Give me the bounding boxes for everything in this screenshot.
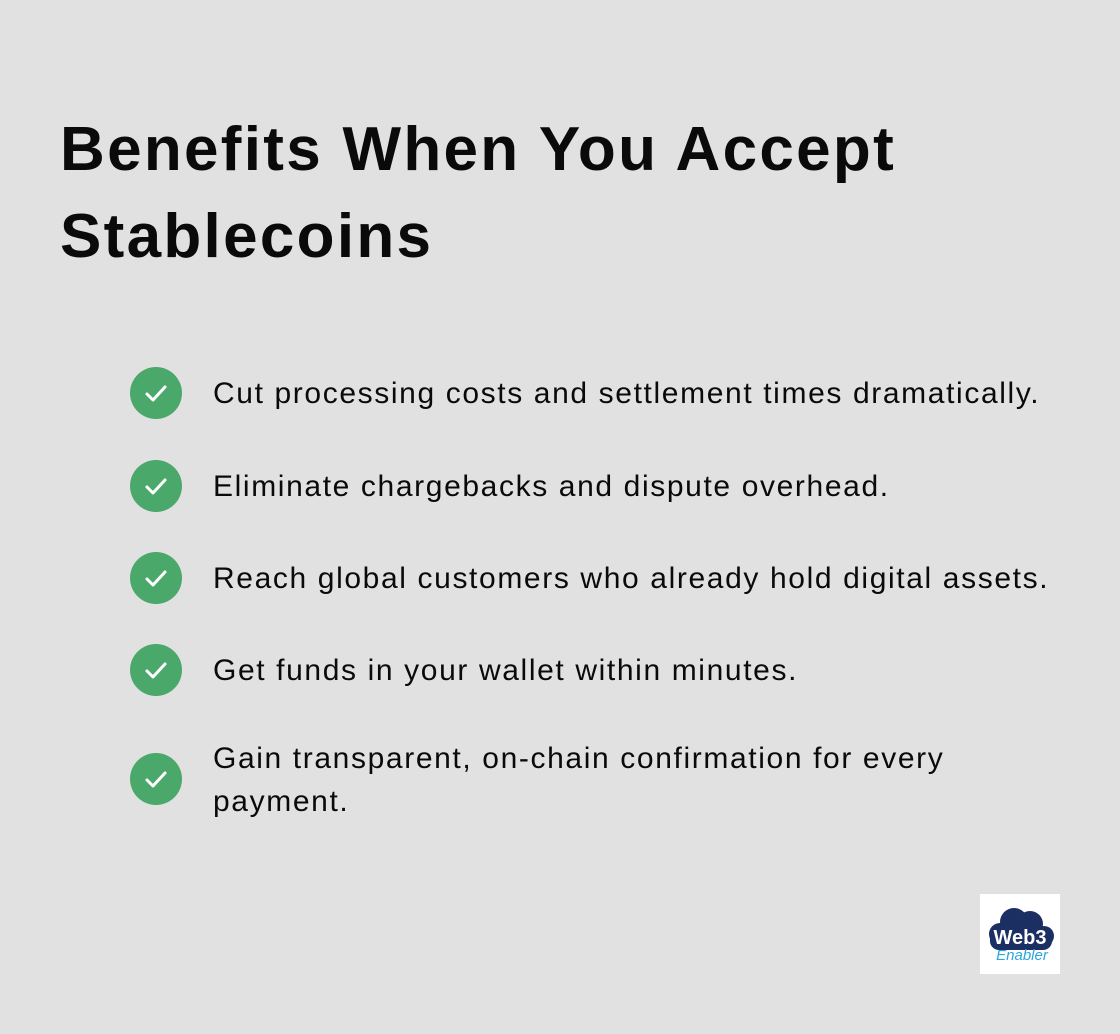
logo: Web3 — [994, 927, 1046, 949]
list item 1 — [130, 367, 1040, 419]
icon: check — [130, 367, 182, 419]
title: Stablecoins — [60, 202, 433, 271]
title: Benefits When You Accept — [60, 115, 896, 184]
list item 3 — [130, 552, 1049, 604]
list item 1: Cut processing costs and settlement times dramatically. — [213, 377, 1040, 410]
icon: check — [130, 753, 182, 805]
list item 5: payment. — [213, 785, 349, 818]
title — [60, 115, 896, 271]
icon: check — [130, 460, 182, 512]
list item 5 — [130, 742, 944, 818]
list item 4: Get funds in your wallet within minutes. — [213, 654, 798, 687]
logo: Enabler — [996, 947, 1049, 964]
icon: check — [130, 552, 182, 604]
list item 5: Gain transparent, on-chain confirmation for every — [213, 742, 944, 775]
logo — [980, 894, 1060, 974]
list item 3: Reach global customers who already hold digital assets. — [213, 562, 1049, 595]
list item 2 — [130, 460, 890, 512]
list item 2: Eliminate chargebacks and dispute overhead. — [213, 470, 890, 503]
list item 4 — [130, 644, 798, 696]
icon: check — [130, 644, 182, 696]
